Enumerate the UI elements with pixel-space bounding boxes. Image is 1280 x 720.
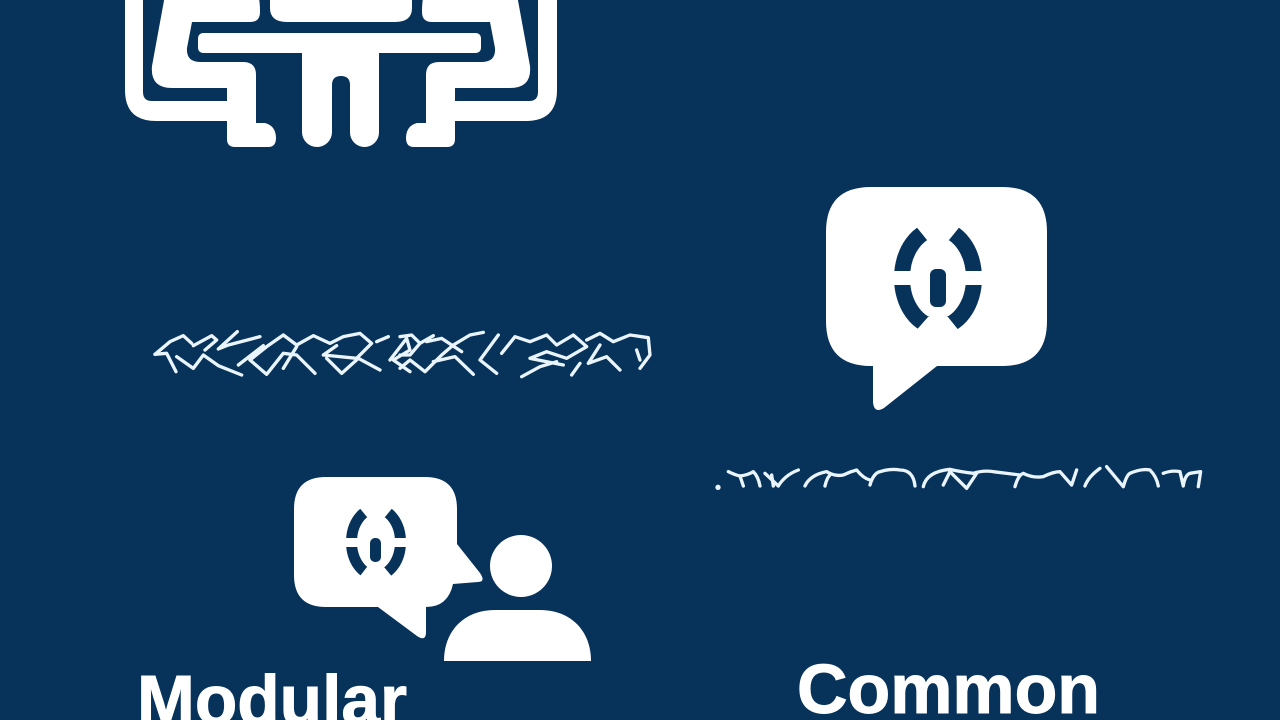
squiggle line: lower right illegible caption <box>715 467 1201 490</box>
center person top <box>270 0 412 22</box>
frame left part <box>125 0 232 121</box>
left person <box>152 0 276 147</box>
table top <box>198 33 481 53</box>
squiggle line: right illegible caption <box>400 332 650 377</box>
icon: speech bubble with ring <box>826 187 1047 410</box>
icon: person beside speech bubble <box>294 477 591 661</box>
speech bubble <box>294 477 483 638</box>
icon: people around a table <box>125 0 557 147</box>
person body <box>444 610 591 661</box>
table pedestal <box>302 50 379 147</box>
person head <box>490 535 552 597</box>
squiggle line: left illegible caption <box>155 332 410 375</box>
frame right part <box>450 0 557 121</box>
right person <box>406 0 530 147</box>
